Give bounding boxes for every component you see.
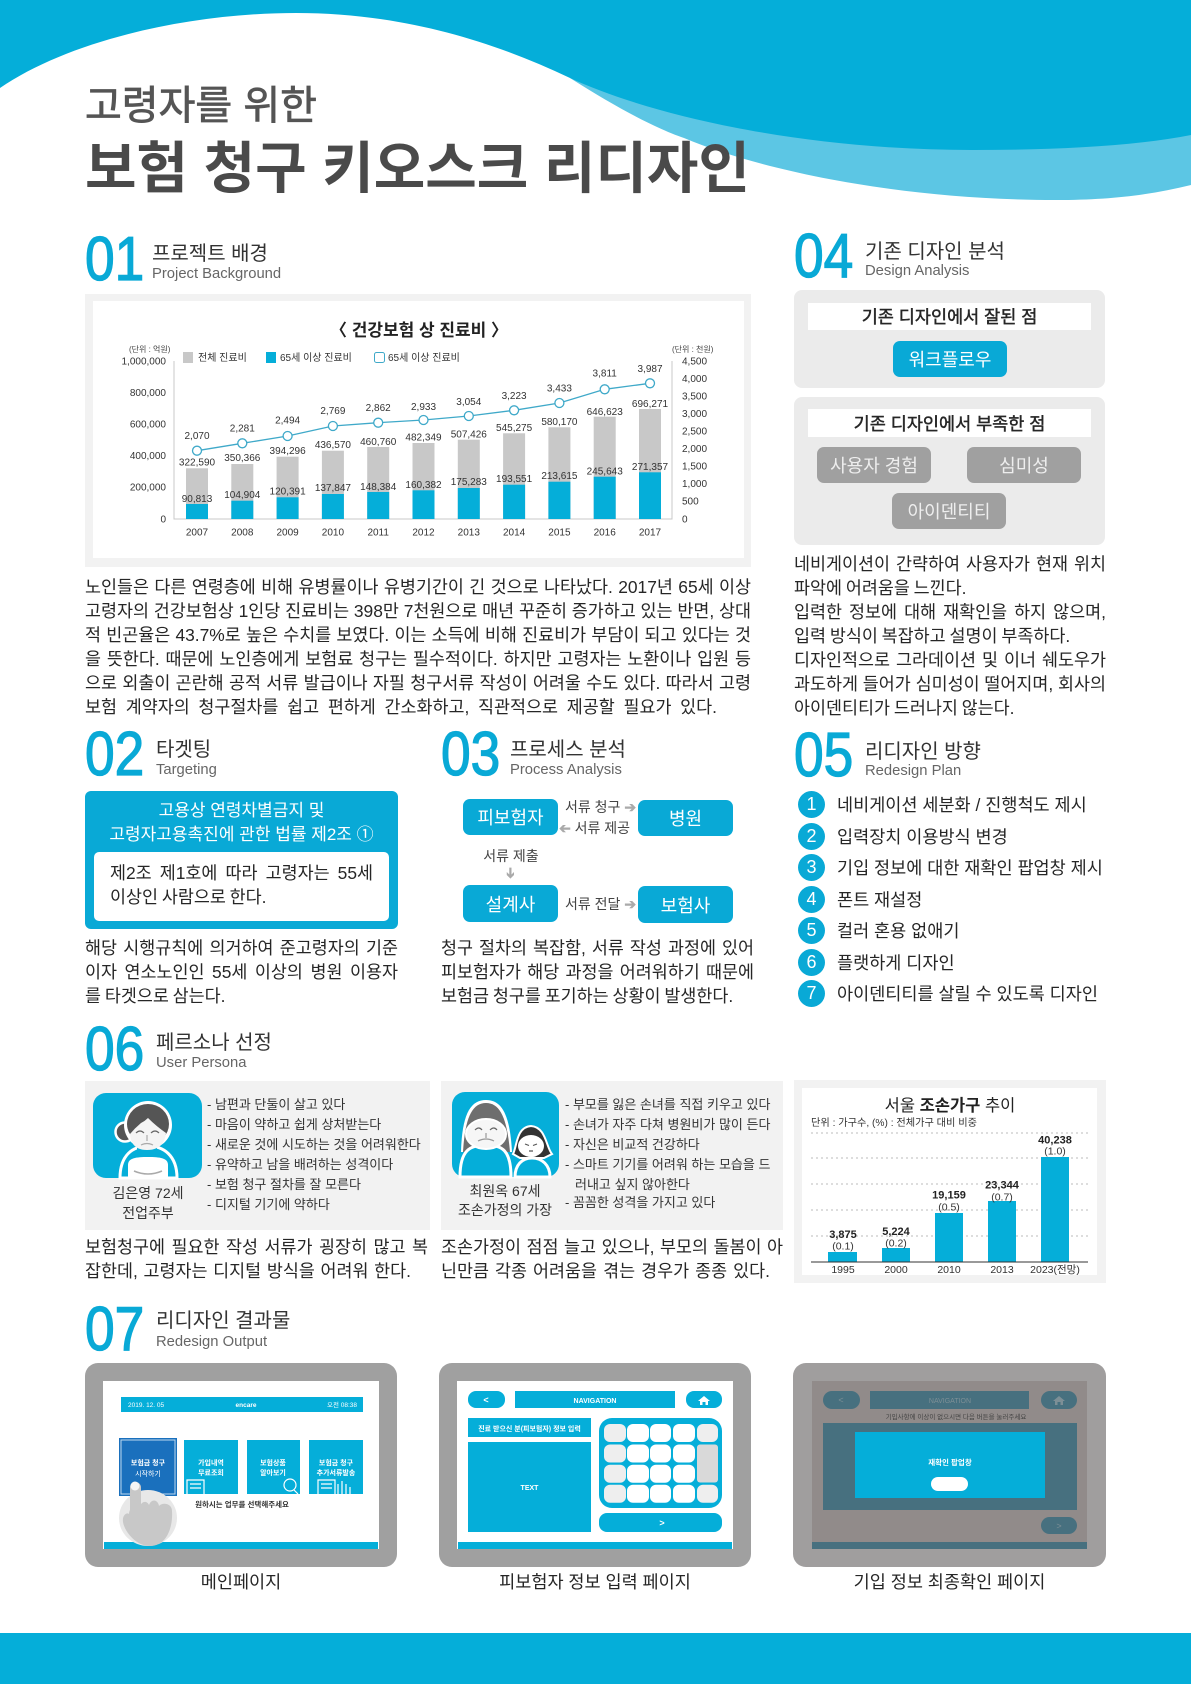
panel: persona 2 <box>441 1081 783 1230</box>
bar and line chart: 2017 <box>639 528 662 538</box>
section header 07: Redesign Output <box>156 1334 267 1350</box>
persona 2 traits <box>565 1097 770 1210</box>
list: redesign plan: 기입 정보에 대한 재확인 팝업창 제시 <box>837 858 1103 878</box>
bar chart: 2010 <box>937 1264 961 1276</box>
bar and line chart: 2008 <box>231 528 254 538</box>
bar and line chart: 1,000,000 <box>122 356 166 368</box>
text block: persona 2 summary <box>441 1237 783 1281</box>
list: redesign plan: 입력장치 이용방식 변경 <box>837 827 1008 847</box>
persona 1 job: 전업주부 <box>122 1205 174 1221</box>
law text box: 제2조 제1호에 따라 고령자는 55세 <box>110 863 373 883</box>
bar and line chart: 4,500 <box>682 356 707 368</box>
bar and line chart: 460,760 <box>360 437 397 448</box>
bar chart <box>802 1088 1097 1276</box>
text block: project background: 을 뜻한다. 때문에 노인층에게 보험료 청구는 필수적이다. 하지만 고령자는 노환이나 입원 등 <box>85 649 751 669</box>
law title: 고용상 연령차별금지 및 <box>159 801 324 820</box>
bar and line chart: 507,426 <box>451 430 487 440</box>
section header 03: 프로세스 분석 <box>510 739 626 761</box>
panel: persona 1 <box>85 1081 430 1230</box>
heading: weak points <box>808 409 1091 437</box>
text block: design analysis: 네비게이션이 간략하여 사용자가 현재 위치 <box>794 554 1106 574</box>
section header 01: Project Background <box>152 266 281 282</box>
kiosk mockup: final confirmation page: 재확인 팝업창 <box>928 1457 972 1467</box>
bar chart: (0.5) <box>938 1202 960 1214</box>
bar and line chart: 3,811 <box>593 368 617 380</box>
persona 1 traits <box>207 1097 421 1212</box>
bar and line chart: 3,987 <box>637 364 663 375</box>
text block: project background <box>85 577 751 717</box>
text block: persona 1 summary: 잡한데, 고령자는 디지털 방식을 어려워 한다. <box>85 1261 411 1281</box>
text block: project background: 노인들은 다른 연령층에 비해 유병률이나 유병기간이 긴 것으로 나타났다. 2017년 65세 이상 <box>85 577 751 597</box>
bar and line chart: 2013 <box>458 528 480 538</box>
law text box <box>94 852 389 921</box>
list: redesign plan: 플랫하게 디자인 <box>837 953 955 973</box>
bar chart: 23,344 <box>985 1180 1020 1192</box>
bar and line chart: 3,054 <box>456 397 482 408</box>
bar and line chart: 2012 <box>412 528 435 538</box>
section header 01: 01 <box>85 225 144 294</box>
title: 보험 청구 키오스크 리디자인 <box>85 137 750 200</box>
list: redesign plan: 5 <box>806 920 816 940</box>
arrow: down: ➔ <box>503 867 519 879</box>
button: workflow: 워크플로우 <box>909 350 991 370</box>
list: redesign plan: 6 <box>806 952 816 972</box>
bar and line chart: 1,500 <box>682 462 707 472</box>
process flow diagram <box>463 799 733 923</box>
bar and line chart: 200,000 <box>130 482 166 494</box>
bar and line chart: 213,615 <box>541 471 578 482</box>
bar and line chart: 245,643 <box>587 466 623 478</box>
kiosk mockup: main page: 보험금 청구 <box>131 1458 166 1467</box>
bar and line chart: 580,170 <box>541 417 578 428</box>
text block: project background: 고령자의 건강보험상 1인당 진료비는 398만 7천원으로 매년 꾸준히 증가하고 있는 반면, 상대 <box>85 601 751 621</box>
kiosk mockup: main page: 무료조회 <box>198 1468 224 1477</box>
list: redesign plan: 컬러 혼용 없애기 <box>837 921 959 941</box>
section header 01 <box>85 225 281 294</box>
bar and line chart: 104,904 <box>224 490 261 501</box>
bar and line chart: 175,283 <box>451 477 487 488</box>
persona 1 traits: - 디지털 기기에 약하다 <box>207 1197 330 1212</box>
bar and line chart: 〈 건강보험 상 진료비 〉 <box>330 321 508 340</box>
caption: main page: 메인페이지 <box>201 1572 281 1592</box>
list: redesign plan: 7 <box>806 983 816 1003</box>
heading: good points: 기존 디자인에서 잘된 점 <box>862 307 1037 327</box>
list: redesign plan: 2 <box>806 826 816 846</box>
button: user experience: 사용자 경험 <box>830 456 918 476</box>
kiosk mockup: insured info input page: < <box>483 1395 489 1405</box>
section header 04 <box>794 222 1005 291</box>
bar and line chart: 2015 <box>548 528 571 538</box>
bar and line chart: 3,500 <box>682 392 707 402</box>
bar chart: 단위 : 가구수, (%) : 전체가구 대비 비중 <box>811 1116 977 1129</box>
bar and line chart: 322,590 <box>179 458 216 468</box>
bar chart: 서울 조손가구 추이 <box>885 1096 1015 1115</box>
bar and line chart: 800,000 <box>130 388 166 399</box>
label: document supply: 서류 제공 <box>575 820 630 836</box>
list: redesign plan <box>798 791 1103 1007</box>
persona 2 traits: 러내고 싶지 않아한다 <box>575 1177 690 1192</box>
section header 03 <box>441 720 626 789</box>
panel: seoul grandparent households chart <box>794 1080 1106 1283</box>
list: redesign plan: 아이덴티티를 살릴 수 있도록 디자인 <box>837 984 1098 1004</box>
section header 02: Targeting <box>156 762 217 778</box>
bar and line chart: 137,847 <box>315 483 351 494</box>
text block: design analysis: 아이덴티티가 드러나지 않는다. <box>794 698 1014 718</box>
section header 03: Process Analysis <box>510 762 622 778</box>
bar and line chart: 2009 <box>276 528 299 538</box>
text block: design analysis: 입력 방식이 복잡하고 설명이 부족하다. <box>794 626 1070 646</box>
bar and line chart: 120,391 <box>270 486 306 498</box>
kiosk mockup: main page: 오전 08:38 <box>327 1400 357 1409</box>
bar and line chart: 0 <box>682 514 688 526</box>
bar chart: (1.0) <box>1044 1146 1066 1158</box>
persona 2 traits: - 자신은 비교적 건강하다 <box>565 1137 700 1152</box>
icon: persona grandmother with apron <box>93 1093 202 1180</box>
bar and line chart: (단위 : 억원) <box>129 344 171 354</box>
bar chart: (0.7) <box>991 1192 1013 1204</box>
panel: health insurance chart <box>85 294 751 567</box>
section header 05: Redesign Plan <box>865 763 961 779</box>
kiosk mockup: final confirmation page: < <box>838 1395 844 1405</box>
persona 2 name: 최원옥 67세 <box>470 1183 540 1199</box>
node: insured <box>463 799 558 835</box>
bar and line chart: (단위 : 천원) <box>672 344 714 354</box>
text block: project background: 보험 계약자의 청구절차를 쉽고 편하게 간소화하고, 직관적으로 제공할 필요가 있다. <box>85 697 717 717</box>
section header 06: 06 <box>85 1015 144 1084</box>
button: workflow <box>893 341 1007 377</box>
bar and line chart: 2,862 <box>366 403 391 414</box>
law title <box>109 801 374 844</box>
bar and line chart: 2010 <box>322 528 344 538</box>
text block: design analysis: 디자인적으로 그라데이션 및 이너 쉐도우가 <box>794 650 1106 670</box>
text block: design analysis: 입력한 정보에 대해 재확인을 하지 않으며, <box>794 602 1106 622</box>
icon: persona grandmother and granddaughter <box>452 1092 559 1178</box>
persona 2 role: 조손가정의 가장 <box>458 1202 552 1218</box>
bar and line chart: 696,271 <box>632 399 669 410</box>
panel: elderly employment law <box>85 791 398 929</box>
text block: persona 2 summary: 조손가정이 점점 늘고 있으나, 부모의 돌봄이 아 <box>441 1237 783 1257</box>
bar and line chart: 400,000 <box>130 451 166 462</box>
text block: targeting <box>85 938 398 1006</box>
text block: persona 1 summary: 보험청구에 필요한 작성 서류가 굉장히 많고 복 <box>85 1237 428 1257</box>
bar and line chart: 545,275 <box>496 423 533 434</box>
bar and line chart: 350,366 <box>224 453 261 464</box>
bar and line chart: 4,000 <box>682 374 707 385</box>
kiosk mockup: final confirmation page: 기입사항에 이상이 없으시면 다음 버튼을 눌러주세요 <box>886 1412 1026 1421</box>
button: aesthetics: 심미성 <box>999 456 1049 476</box>
bar and line chart: 160,382 <box>405 480 442 491</box>
kiosk mockup: main page: 원하시는 업무를 선택해주세요 <box>195 1499 289 1509</box>
footer band <box>0 1633 1191 1684</box>
section header 06: User Persona <box>156 1055 246 1071</box>
text block: targeting: 를 타겟으로 삼는다. <box>85 986 226 1006</box>
text block: persona 2 summary: 닌만큼 각종 어려움을 겪는 경우가 종종 있다. <box>441 1261 770 1281</box>
kiosk mockup: insured info input page <box>439 1363 751 1567</box>
bar and line chart: 646,623 <box>587 407 623 418</box>
section header 04: Design Analysis <box>865 263 969 279</box>
list: redesign plan: 4 <box>806 889 816 909</box>
text block: targeting: 이자 연소노인인 55세 이상의 병원 이용자 <box>85 962 398 982</box>
bar and line chart: 148,384 <box>360 482 397 493</box>
bar chart: 3,875 <box>829 1229 857 1241</box>
bar and line chart: 0 <box>160 514 166 526</box>
bar and line chart: 600,000 <box>130 420 166 430</box>
bar and line chart: 90,813 <box>182 494 213 505</box>
kiosk mockup: main page: encare <box>236 1402 257 1409</box>
bar and line chart: 65세 이상 진료비 <box>280 352 352 364</box>
heading: good points <box>808 303 1091 330</box>
persona 1 traits: - 새로운 것에 시도하는 것을 어려워한다 <box>207 1137 421 1152</box>
section header 03: 03 <box>441 720 500 789</box>
label: claim documents: 서류 청구 ➔ <box>565 799 636 815</box>
kiosk mockup: final confirmation page <box>793 1363 1106 1567</box>
text block: targeting: 해당 시행규칙에 의거하여 준고령자의 기준 <box>85 938 398 958</box>
node: planner: 설계사 <box>486 894 535 914</box>
text block: process analysis <box>441 938 754 1006</box>
bar and line chart: 2016 <box>594 528 616 538</box>
bar and line chart: 전체 진료비 <box>198 352 247 364</box>
bar and line chart: 482,349 <box>405 432 442 444</box>
bar chart: (0.2) <box>885 1238 907 1250</box>
list: redesign plan: 3 <box>806 857 816 877</box>
bar chart: 40,238 <box>1038 1134 1072 1146</box>
node: insured: 피보험자 <box>477 808 544 828</box>
bar and line chart: 2011 <box>367 528 389 538</box>
kiosk mockup: insured info input page: 진료 받으신 분(피보험자) 정보 입력 <box>478 1424 581 1433</box>
section header 05 <box>794 721 981 790</box>
bar and line chart: 3,223 <box>502 391 527 402</box>
node: planner <box>463 885 558 922</box>
bar chart: 2013 <box>990 1264 1014 1276</box>
kiosk mockup: main page: 2019. 12. 05 <box>128 1402 165 1409</box>
law title: 고령자고용촉진에 관한 법률 제2조 ① <box>109 825 374 844</box>
node: insurer: 보험사 <box>661 896 710 916</box>
text block: persona 1 summary <box>85 1237 428 1281</box>
section header 05: 리디자인 방향 <box>865 741 981 763</box>
header wave background <box>0 0 1191 200</box>
section header 05: 05 <box>794 721 853 790</box>
bar and line chart: 2,070 <box>184 431 210 442</box>
bar and line chart: 2,500 <box>682 426 707 438</box>
persona 2 traits: - 스마트 기기를 어려워 하는 모습을 드 <box>565 1157 770 1172</box>
caption: confirmation page: 기입 정보 최종확인 페이지 <box>854 1572 1045 1592</box>
persona 2 traits: - 꼼꼼한 성격을 가지고 있다 <box>565 1195 715 1210</box>
button: user experience <box>817 447 931 483</box>
panel: good points of existing design <box>794 290 1105 388</box>
bar chart: 19,159 <box>932 1190 966 1202</box>
persona 1 traits: - 보험 청구 절차를 잘 모른다 <box>207 1177 361 1192</box>
bar chart: (0.1) <box>832 1240 854 1252</box>
section header 07: 07 <box>85 1295 144 1364</box>
button: identity: 아이덴티티 <box>908 502 990 522</box>
persona 1 traits: - 마음이 약하고 쉽게 상처받는다 <box>207 1117 381 1132</box>
persona 1 traits: - 유약하고 남을 배려하는 성격이다 <box>207 1157 393 1172</box>
persona 2 traits: - 손녀가 자주 다쳐 병원비가 많이 든다 <box>565 1117 770 1132</box>
section header 07: 리디자인 결과물 <box>156 1310 290 1332</box>
bar and line chart: 3,433 <box>547 384 572 394</box>
section header 06: 페르소나 선정 <box>156 1032 272 1054</box>
bar and line chart: 3,000 <box>682 409 707 420</box>
bar and line chart <box>93 301 744 558</box>
label: document delivery: 서류 전달 ➔ <box>565 896 636 912</box>
text block: design analysis <box>794 554 1106 718</box>
text block: process analysis: 보험금 청구를 포기하는 상황이 발생한다. <box>441 986 733 1006</box>
list: redesign plan: 1 <box>806 794 816 814</box>
bar and line chart: 500 <box>682 496 699 508</box>
kiosk mockup: main page: 알아보기 <box>260 1468 286 1477</box>
text block: project background: 으로 외출이 곤란해 공적 서류 발급이나 자필 청구서류 작성이 어려울 수도 있다. 따라서 고령 <box>85 673 751 693</box>
section header 02 <box>85 720 217 789</box>
bar chart: 1995 <box>831 1264 855 1276</box>
bar and line chart: 394,296 <box>270 446 306 457</box>
kiosk mockup: main page <box>85 1363 397 1567</box>
bar and line chart: 2,281 <box>230 424 255 434</box>
text block: design analysis: 과도하게 들어가 심미성이 떨어지며, 회사의 <box>794 674 1106 694</box>
text block: design analysis: 파악에 어려움을 느낀다. <box>794 578 966 598</box>
kiosk mockup: main page: 보험상품 <box>260 1458 286 1467</box>
persona 2 traits: - 부모를 잃은 손녀를 직접 키우고 있다 <box>565 1097 770 1112</box>
bar and line chart: 271,357 <box>632 462 669 473</box>
section header 01: 프로젝트 배경 <box>152 243 268 265</box>
kiosk mockup: final confirmation page: > <box>1056 1521 1062 1531</box>
text block: project background: 적 빈곤율은 43.7%로 높은 수치를 보였다. 이는 소득에 비해 진료비가 부담이 되고 있다는 것 <box>85 625 751 645</box>
bar and line chart: 2007 <box>186 528 209 538</box>
bar and line chart: 193,551 <box>496 474 533 485</box>
bar and line chart: 1,000 <box>682 479 707 490</box>
bar and line chart: 2,000 <box>682 444 707 455</box>
kiosk mockup: main page: 추가서류발송 <box>317 1468 356 1477</box>
bar chart: 2000 <box>884 1264 908 1276</box>
kiosk mockup: insured info input page: NAVIGATION <box>574 1398 616 1405</box>
title <box>85 84 750 200</box>
bar chart: 2023(전망) <box>1030 1264 1080 1276</box>
button: aesthetics <box>967 447 1081 483</box>
bar and line chart: 65세 이상 진료비 <box>388 352 460 364</box>
section header 02: 타겟팅 <box>156 739 211 761</box>
section header 07 <box>85 1295 290 1364</box>
text block: process analysis: 피보험자가 해당 과정을 어려워하기 때문에 <box>441 962 754 982</box>
kiosk mockup: final confirmation page: NAVIGATION <box>929 1398 971 1405</box>
bar and line chart: 2,769 <box>320 406 346 417</box>
bar chart: 5,224 <box>882 1226 911 1238</box>
bar and line chart: 436,570 <box>315 440 351 451</box>
section header 02: 02 <box>85 720 144 789</box>
label: document submit: 서류 제출 <box>483 848 539 864</box>
button: identity <box>892 493 1006 529</box>
kiosk mockup: insured info input page: > <box>659 1518 665 1528</box>
bar and line chart: 2,494 <box>275 416 301 426</box>
panel: weak points of existing design <box>794 397 1105 545</box>
bar and line chart: 2,933 <box>411 402 436 413</box>
title: 고령자를 위한 <box>85 84 317 128</box>
kiosk mockup: insured info input page: TEXT <box>521 1485 539 1492</box>
law text box: 이상인 사람으로 한다. <box>110 887 266 907</box>
kiosk mockup: main page: 보험금 청구 <box>319 1458 354 1467</box>
text block: process analysis: 청구 절차의 복잡함, 서류 작성 과정에 있어 <box>441 938 754 958</box>
kiosk mockup: main page: 가입내역 <box>198 1458 224 1467</box>
list: redesign plan: 폰트 재설정 <box>837 890 922 910</box>
node: hospital: 병원 <box>669 809 702 829</box>
label: document supply: ➔ <box>559 820 571 836</box>
node: hospital <box>638 800 733 836</box>
section header 04: 기존 디자인 분석 <box>865 241 1005 263</box>
kiosk mockup: main page: 시작하기 <box>135 1469 161 1478</box>
persona 1 name: 김은영 72세 <box>112 1185 183 1201</box>
persona 1 traits: - 남편과 단둘이 살고 있다 <box>207 1097 345 1112</box>
bar and line chart: 2014 <box>503 528 526 538</box>
caption: input page: 피보험자 정보 입력 페이지 <box>499 1572 691 1592</box>
list: redesign plan: 네비게이션 세분화 / 진행척도 제시 <box>837 795 1087 815</box>
node: insurer <box>638 886 733 923</box>
heading: weak points: 기존 디자인에서 부족한 점 <box>854 414 1045 434</box>
section header 06 <box>85 1015 272 1084</box>
section header 04: 04 <box>794 222 853 291</box>
